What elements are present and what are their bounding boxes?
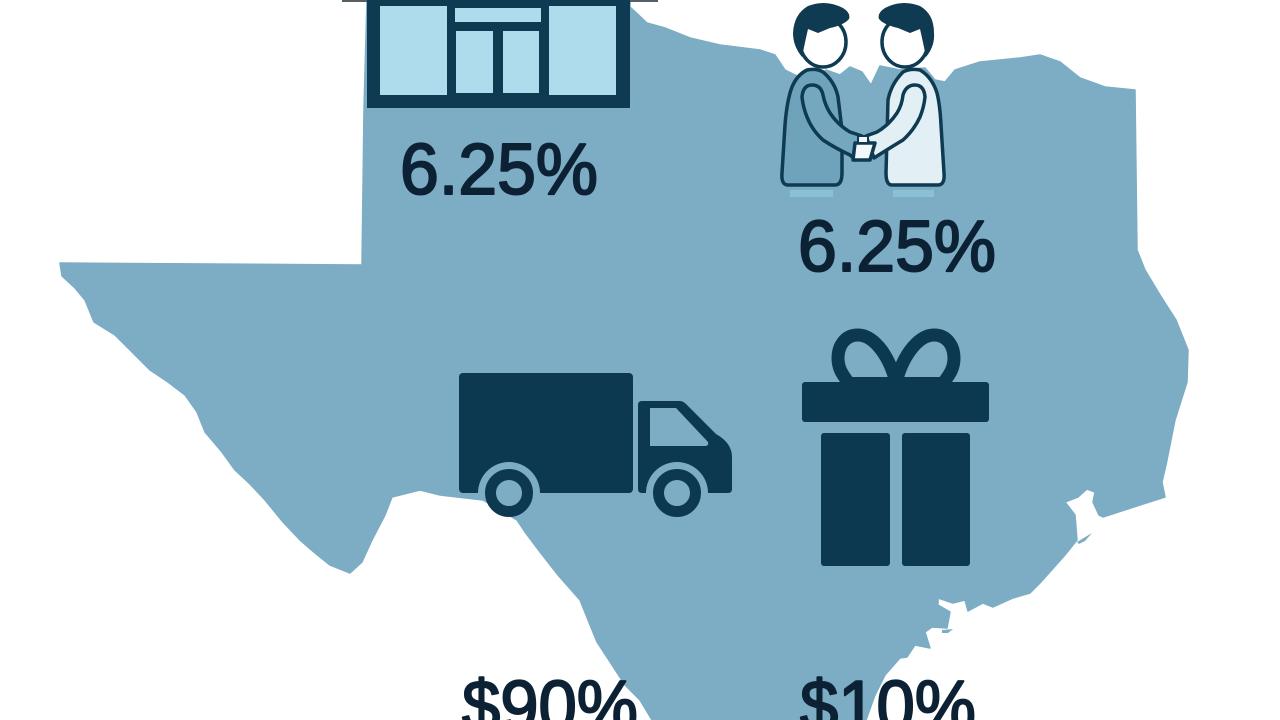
icon: storefront <box>342 0 658 108</box>
icon: gift box <box>802 335 989 566</box>
label: services rate: 6.25% <box>798 207 996 287</box>
icon: handshake between two people <box>782 3 944 197</box>
label: store rate: 6.25% <box>400 130 598 210</box>
icon: delivery truck <box>459 373 732 512</box>
